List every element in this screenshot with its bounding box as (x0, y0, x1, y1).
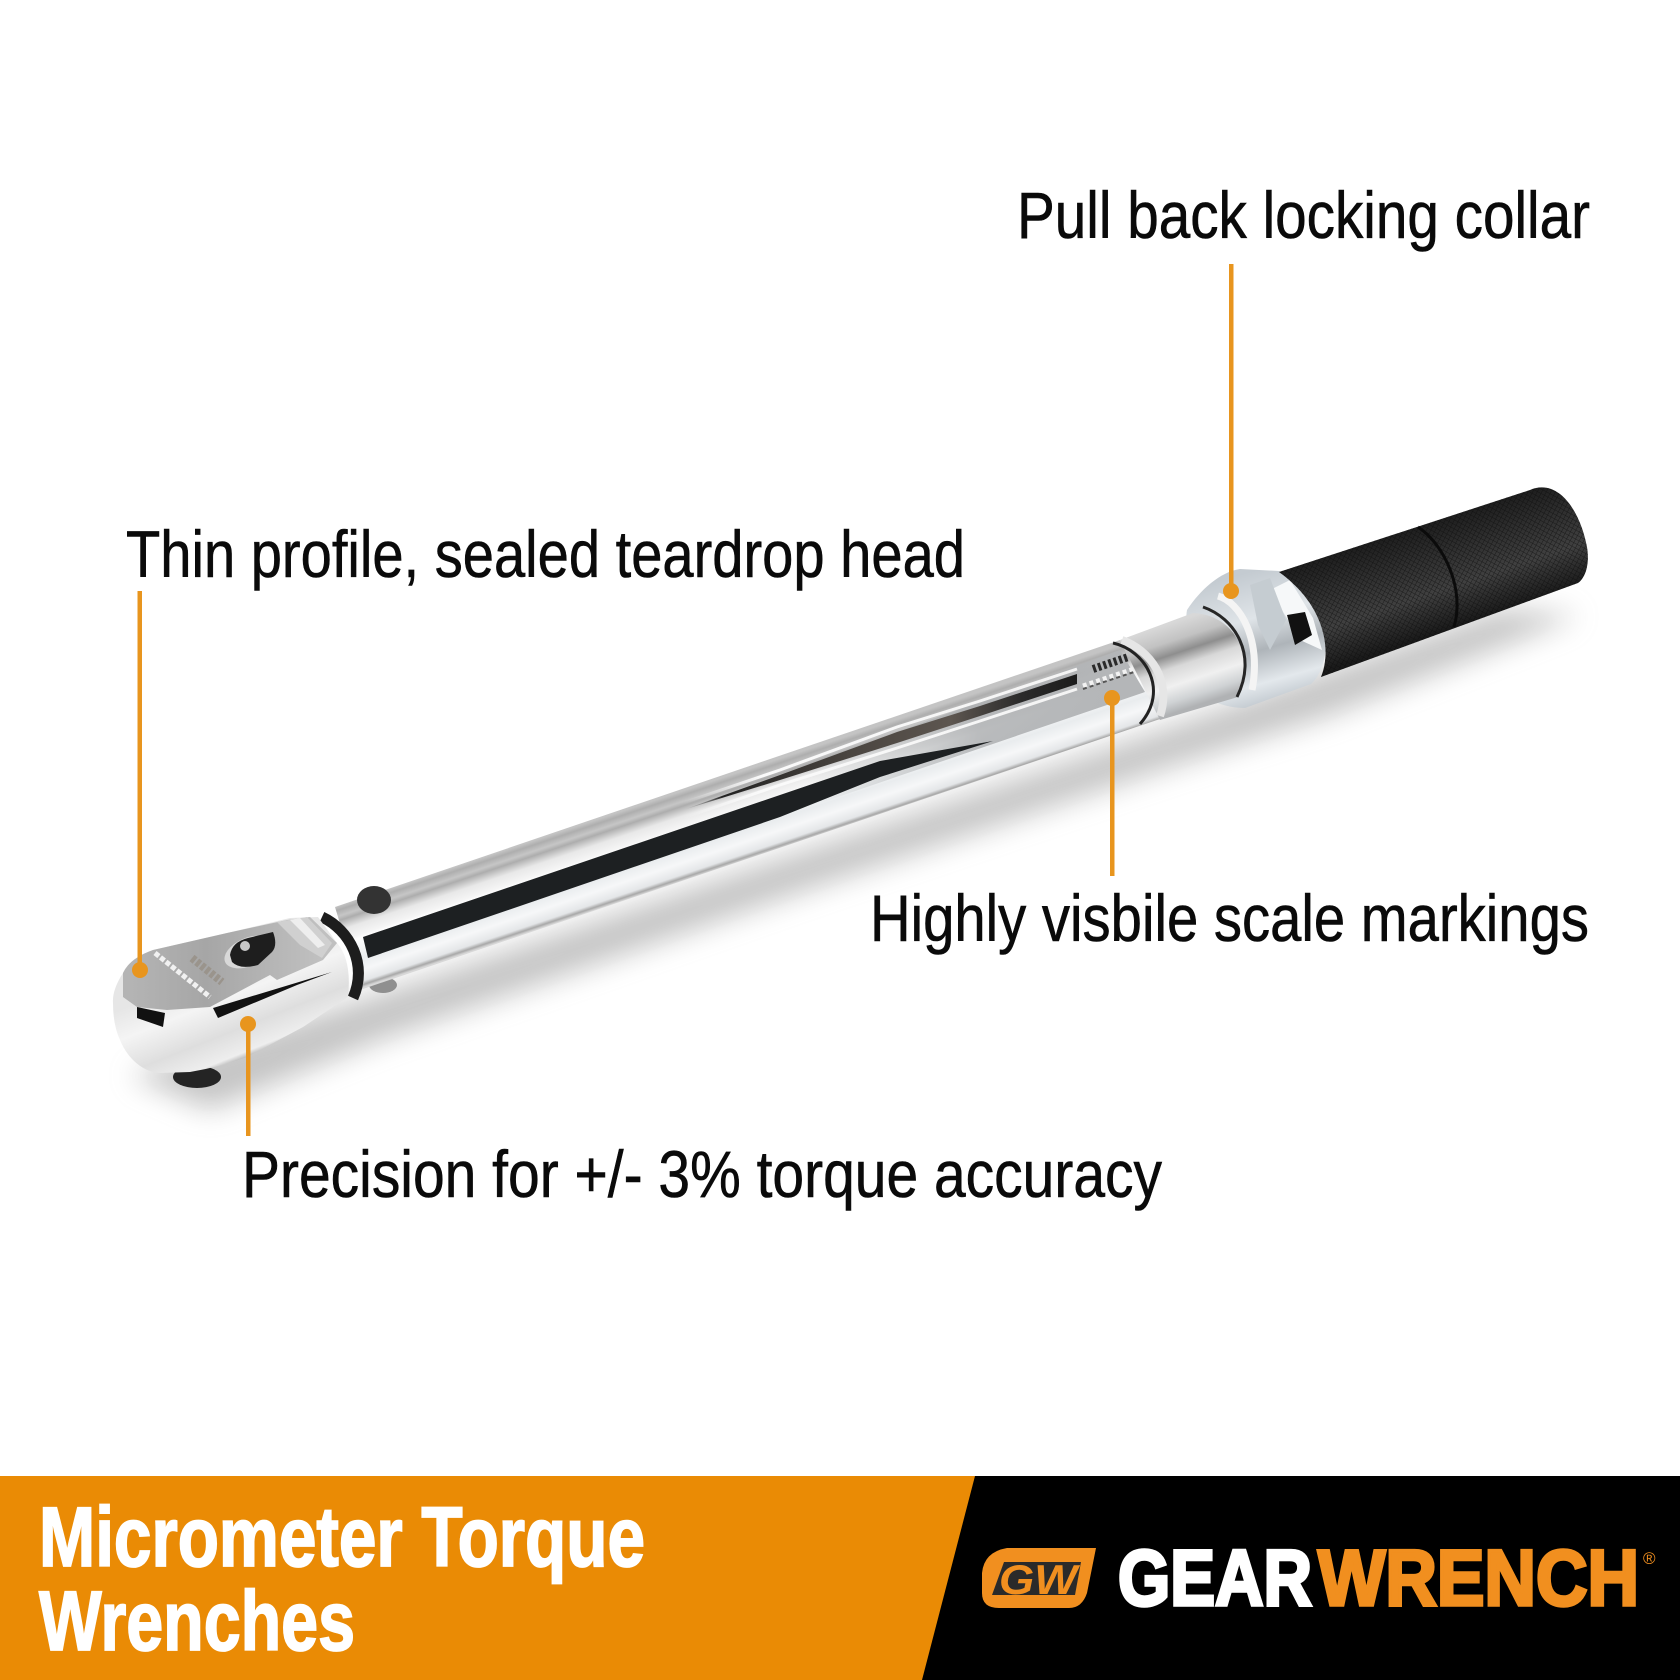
wordmark (1118, 1533, 1656, 1622)
footer band: orange title panel (0, 1476, 1000, 1680)
callout: locking collar: Pull back locking collar (1017, 178, 1590, 252)
adjustment tube (1120, 607, 1245, 720)
footer title (39, 1490, 645, 1668)
callout: locking collar (1017, 178, 1590, 599)
footer title: Micrometer Torque (39, 1490, 645, 1584)
reversing lever (219, 929, 277, 975)
icon: GW badge: GW (999, 1556, 1081, 1603)
wrench shaft (335, 640, 1160, 990)
neck ring (322, 917, 358, 998)
wordmark: ® (1643, 1549, 1656, 1568)
callout: teardrop head (126, 517, 965, 978)
knurled grip (1279, 487, 1588, 677)
wrench drop shadow (130, 610, 1580, 1110)
lower rivet (369, 977, 397, 993)
callout: torque accuracy: Precision for +/- 3% torque accuracy (242, 1137, 1162, 1211)
GEARWRENCH logo (982, 1533, 1656, 1622)
callout: torque accuracy (240, 1016, 1162, 1211)
callout: scale markings (870, 690, 1589, 955)
scale ring (1113, 640, 1163, 724)
footer title: Wrenches (39, 1574, 355, 1668)
wordmark: WRENCH (1318, 1533, 1639, 1622)
shaft button (357, 886, 391, 914)
wordmark: GEAR (1118, 1533, 1312, 1622)
head reflections (137, 917, 332, 1027)
icon: GW badge (982, 1548, 1096, 1608)
callout: teardrop head: Thin profile, sealed teardrop head (126, 517, 965, 591)
head top plate (123, 917, 337, 1010)
locking collar flange (1186, 569, 1326, 708)
footer band: black brand panel (922, 1476, 1680, 1680)
drive square (173, 1066, 221, 1088)
plate markings (155, 953, 222, 997)
scale markings (1083, 652, 1143, 689)
torque wrench illustration (113, 487, 1588, 1088)
ratchet head (113, 917, 349, 1073)
